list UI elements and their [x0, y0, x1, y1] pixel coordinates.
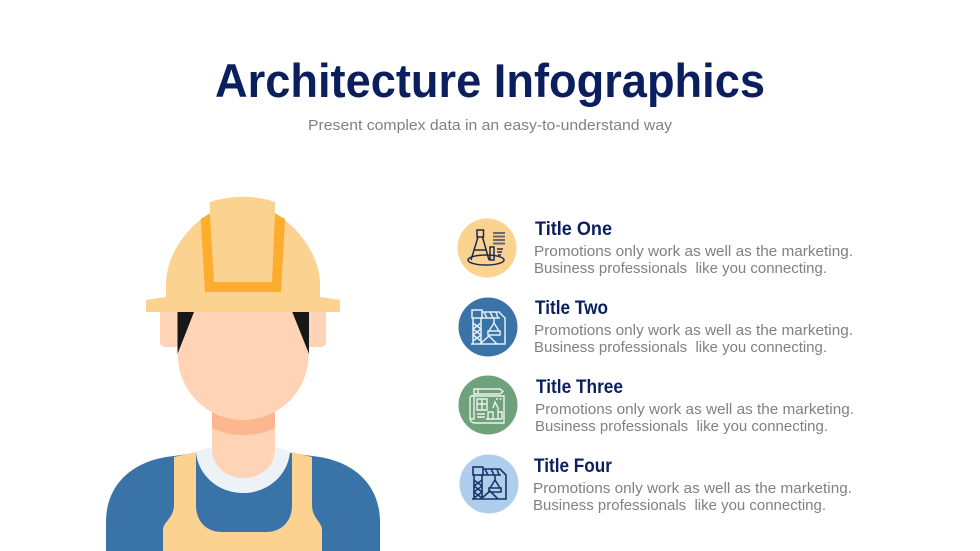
shirt [106, 446, 380, 551]
hair [178, 310, 309, 354]
icon: blueprint and pencil [458, 376, 518, 434]
heading: Title Three [536, 377, 623, 398]
item 4: Business professionals like you connecting. [533, 498, 826, 514]
description: Promotions only work as well as the marketing. [534, 323, 853, 339]
hat stripe [201, 214, 285, 292]
item 4 [460, 454, 852, 514]
heading: Title One [535, 219, 612, 240]
item 1 [458, 218, 853, 278]
hard hat [146, 197, 340, 312]
heading: Title Four [534, 456, 613, 477]
overall straps and bib [163, 452, 322, 551]
heading: Title Two [535, 298, 608, 319]
description: Promotions only work as well as the marketing. [533, 481, 852, 497]
neck [212, 410, 275, 478]
item 1: Business professionals like you connecting. [534, 261, 827, 277]
neck shadow [212, 410, 275, 435]
title: Architecture Infographics [215, 54, 765, 107]
icon: tower crane [458, 298, 518, 356]
item 2: Business professionals like you connecting. [534, 340, 827, 356]
icon: tower crane [460, 454, 518, 514]
illustration: construction worker [106, 197, 380, 551]
collar [196, 448, 290, 493]
icon: compass on circle [458, 218, 516, 278]
description: Promotions only work as well as the marketing. [534, 244, 853, 260]
item 3 [458, 376, 854, 435]
face [178, 312, 309, 420]
subtitle: Present complex data in an easy-to-understand way [308, 118, 673, 134]
item 2 [458, 298, 853, 356]
description: Promotions only work as well as the marketing. [535, 402, 854, 418]
item 3: Business professionals like you connecting. [535, 419, 828, 435]
ears [160, 305, 326, 347]
